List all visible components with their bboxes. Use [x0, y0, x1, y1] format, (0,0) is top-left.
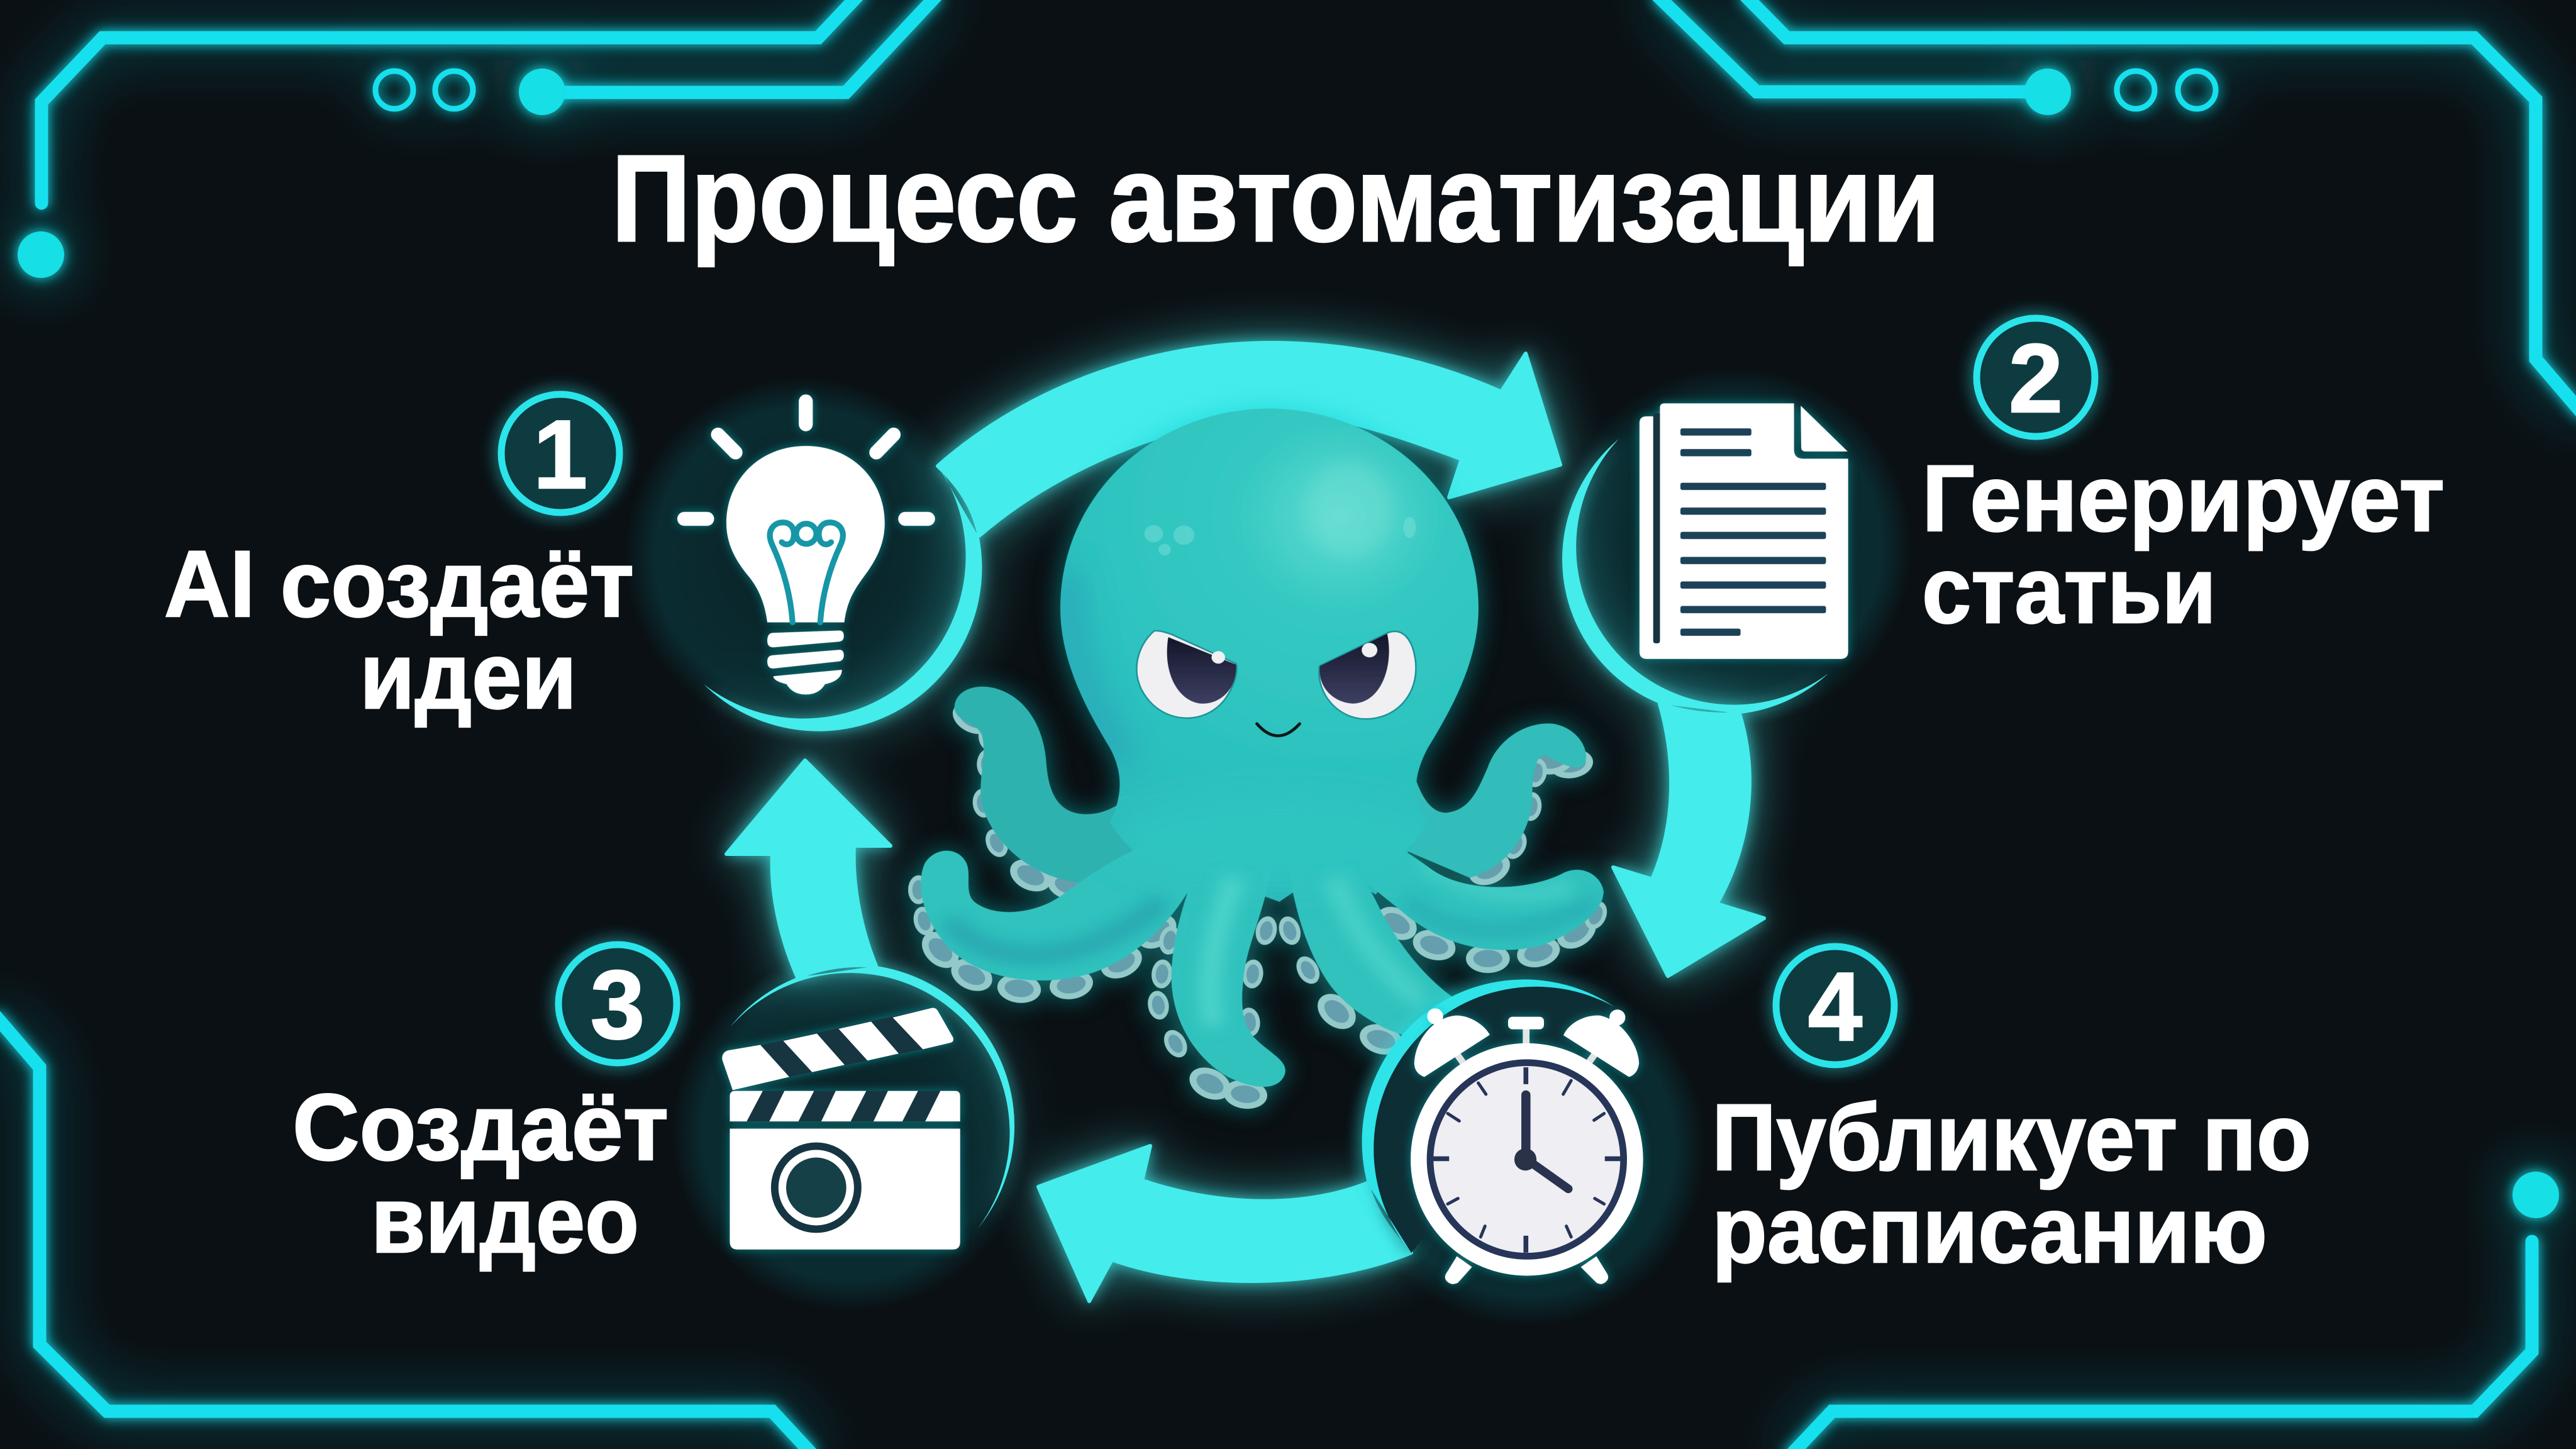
ring: top left 2	[435, 71, 473, 109]
node: left	[18, 231, 64, 278]
clock bell connectors	[1457, 1029, 1595, 1062]
trace: top right inner	[1655, 0, 2048, 92]
octopus mascot	[908, 409, 1611, 1111]
bulb filament	[770, 523, 843, 623]
tentacles and body shading	[921, 830, 1604, 1087]
label: step 2	[1922, 445, 2445, 643]
label: step 3: Создаёт	[292, 1074, 669, 1180]
circle bg: video	[671, 953, 1030, 1312]
tentacle: back left	[955, 687, 1172, 883]
ring: top right 1	[2117, 71, 2155, 109]
document back page edge	[1653, 413, 1660, 643]
trace: bottom right	[1790, 1241, 2532, 1449]
bulb base	[767, 631, 844, 694]
arrow: left, step 3 to step 1	[726, 760, 891, 977]
badge 1	[501, 394, 619, 513]
trace: top left outer	[42, 0, 860, 203]
clock hands	[1526, 1095, 1568, 1189]
title: Процесс автоматизации	[611, 130, 1940, 267]
bulb glass	[726, 446, 885, 623]
crescent: document	[1562, 439, 1828, 714]
soft shading clipped to silhouette	[948, 570, 1595, 1027]
clock disc and crescent	[1362, 979, 1614, 1253]
arrow: top, step 1 to step 2	[938, 343, 1560, 536]
suckers: front tentacles	[908, 875, 1611, 1111]
icon: light bulb	[684, 401, 928, 694]
clapper stripes dark	[760, 1008, 933, 1077]
circle bg: clock	[1348, 969, 1706, 1327]
clapper top stick	[722, 1008, 953, 1090]
trace: bottom left	[0, 1014, 813, 1449]
document page	[1640, 403, 1848, 659]
badge 3: 3	[591, 950, 645, 1059]
suckers: back tentacles	[947, 696, 1596, 904]
eye: right	[1319, 631, 1416, 719]
label: step 1: AI создаёт	[164, 531, 634, 636]
trace: top left inner	[542, 0, 938, 92]
trace: top right outer	[1743, 0, 2576, 416]
badge 2: 2	[2009, 324, 2063, 433]
clock minor ticks	[1448, 1080, 1604, 1237]
label: step 3	[292, 1074, 669, 1272]
circle bg: document	[1554, 367, 1913, 726]
badge 4: 4	[1808, 952, 1862, 1061]
clapper lens	[771, 1142, 862, 1233]
document fold	[1801, 406, 1848, 452]
label: step 4	[1712, 1084, 2311, 1282]
clapper lower stripes dark	[730, 1091, 960, 1121]
label: step 4: Публикует по	[1712, 1084, 2311, 1190]
label: step 4: расписанию	[1712, 1177, 2267, 1282]
arrow: right, step 2 to step 4	[1613, 704, 1764, 976]
ring: top left 1	[375, 71, 413, 109]
label: step 3: видео	[371, 1167, 639, 1272]
label: step 1: идеи	[360, 623, 577, 728]
clapper body	[730, 1129, 960, 1250]
head glints	[1144, 517, 1416, 555]
icon: document	[1640, 403, 1848, 659]
node: top right	[2024, 69, 2071, 115]
label: step 2: Генерирует	[1922, 445, 2445, 551]
head highlight	[1306, 462, 1394, 558]
bulb rays	[684, 401, 928, 519]
clock bells	[1414, 1008, 1639, 1077]
head and body	[1060, 409, 1479, 902]
badge 3	[558, 945, 677, 1063]
tentacle: back right	[1402, 723, 1586, 878]
clock hub	[1514, 1148, 1536, 1170]
clock face	[1430, 1063, 1624, 1256]
clock case	[1411, 1043, 1643, 1275]
crescent: video	[730, 966, 1014, 1228]
badge 2	[1977, 318, 2095, 436]
label: step 2: статьи	[1922, 537, 2216, 643]
clapper lower stripes	[730, 1091, 960, 1121]
badge 4	[1776, 947, 1894, 1065]
node: right	[2512, 1172, 2559, 1218]
node: top left	[519, 69, 565, 115]
icon: clapperboard	[722, 1008, 960, 1250]
step backgrounds	[624, 367, 1913, 1327]
eye: left	[1136, 631, 1236, 718]
crescent: bulb	[704, 466, 982, 731]
label: step 1	[164, 531, 634, 728]
circle bg: bulb	[624, 377, 982, 735]
badge 1: 1	[533, 400, 587, 509]
icon: alarm clock	[1411, 1008, 1643, 1284]
clock feet	[1445, 1256, 1608, 1284]
cycle arrows and crescents	[704, 343, 1828, 1301]
arrow: bottom, step 4 to step 3	[1038, 1146, 1411, 1301]
ring: top right 2	[2178, 71, 2216, 109]
clock ticks	[1433, 1067, 1622, 1253]
smile	[1257, 724, 1300, 736]
document text lines	[1680, 428, 1826, 636]
